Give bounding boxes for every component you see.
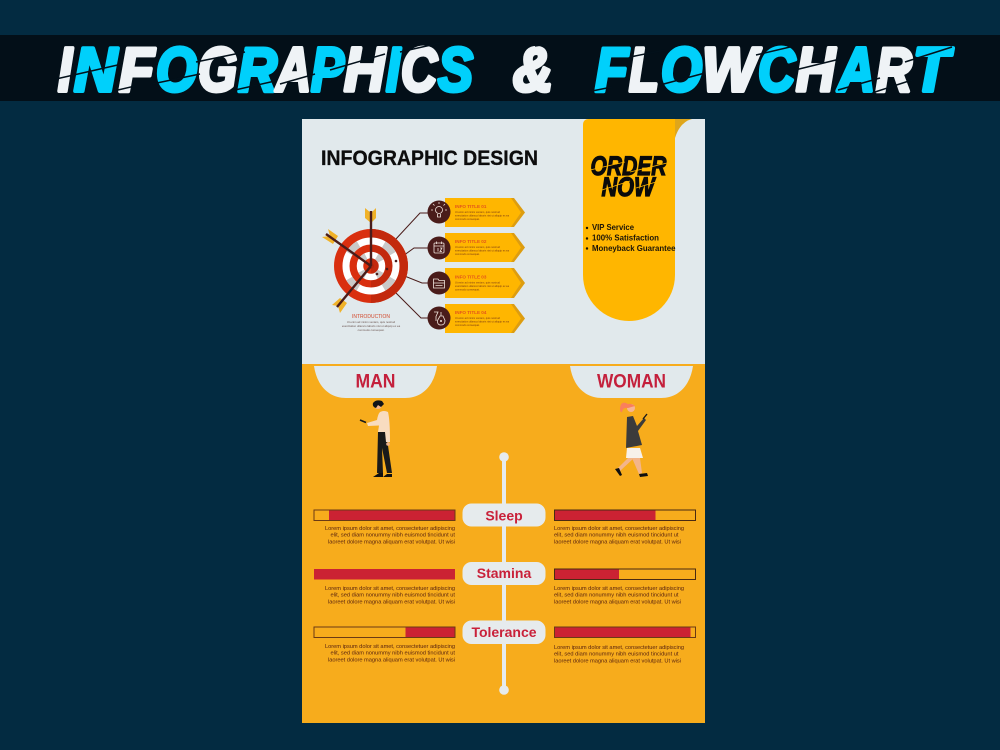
order now bullets: 100% Satisfaction (592, 234, 659, 242)
row: tolerance man (314, 627, 455, 663)
info item 04: commodo consequat. (455, 323, 480, 327)
row: sleep woman: Lorem ipsum dolor sit amet, consectetuer adipiscing (554, 526, 684, 532)
order now bullets: VIP Service (592, 223, 634, 232)
icon: calendar (428, 236, 450, 260)
label: sleep: Sleep (485, 508, 523, 524)
order now heading (590, 151, 667, 202)
info item 03: exercitation ullamco laboris nisi ut aliquip ex ea (455, 284, 510, 288)
row: sleep woman (554, 510, 696, 545)
info item 01: INFO TITLE 01 (455, 204, 487, 209)
icon: folder (428, 272, 450, 294)
info item 04: Ut enim ad minim veniam, quis nostrud (455, 316, 500, 320)
figure: woman with phone (615, 403, 648, 477)
panel: top light area (302, 119, 705, 365)
row: tolerance woman: Lorem ipsum dolor sit amet, consectetuer adipiscing (554, 645, 684, 651)
info item 02 (428, 233, 525, 262)
title: Infographics & Flowchart: I (386, 36, 401, 105)
arrow: bottom left (332, 266, 371, 313)
info item 04: INFO TITLE 04 (455, 310, 487, 315)
info item 04 (428, 304, 525, 333)
title: Infographics & Flowchart: W (702, 36, 761, 105)
title: Infographics & Flowchart: S (438, 36, 473, 105)
icon: light bulb (428, 200, 450, 224)
label: stamina: Stamina (477, 565, 531, 581)
title: Infographics & Flowchart (56, 36, 954, 105)
timeline (462, 452, 546, 695)
title: Infographics & Flowchart: P (311, 36, 345, 105)
row: sleep man: Lorem ipsum dolor sit amet, consectetuer adipiscing (325, 526, 455, 532)
title: Infographics & Flowchart: & (513, 36, 553, 105)
title: Infographics & Flowchart: F (595, 36, 630, 105)
icon: money bag (428, 306, 450, 330)
heading: infographic design: INFOGRAPHIC DESIGN (321, 147, 538, 170)
tab: man: MAN (356, 372, 396, 392)
order now bullets: Moneyback Guarantee (592, 244, 676, 253)
info item 02: exercitation ullamco laboris nisi ut aliquip ex ea (455, 248, 510, 252)
info item 01: exercitation ullamco laboris nisi ut aliquip ex ea (455, 214, 510, 218)
title: Infographics & Flowchart: O (156, 36, 197, 105)
order now heading: ORDER (590, 151, 667, 181)
order now ribbon (583, 119, 692, 321)
title: Infographics & Flowchart: L (629, 36, 659, 105)
row: stamina man: elit, sed diam nonummy nibh euismod tincidunt ut (330, 593, 455, 599)
title: Infographics & Flowchart: I (58, 36, 73, 105)
row: tolerance man: elit, sed diam nonummy nibh euismod tincidunt ut (330, 651, 455, 657)
info item 03: INFO TITLE 03 (455, 274, 487, 280)
row: tolerance woman (554, 627, 696, 664)
title: Infographics & Flowchart: C (401, 36, 438, 105)
row: sleep man: laoreet dolore magna aliquam erat volutpat. Ut wisi (328, 539, 455, 545)
row: stamina man: laoreet dolore magna aliquam erat volutpat. Ut wisi (328, 599, 455, 605)
info item 02: commodo consequat. (455, 252, 480, 256)
row: tolerance woman: elit, sed diam nonummy nibh euismod tincidunt ut (554, 652, 679, 658)
info item 04: exercitation ullamco laboris nisi ut aliquip ex ea (455, 320, 510, 324)
info item 01 (428, 198, 525, 227)
poster (302, 119, 705, 723)
introduction text: Ut enim ad minim veniam, quis nostrud (347, 320, 396, 324)
row: stamina woman: laoreet dolore magna aliquam erat volutpat. Ut wisi (554, 599, 681, 605)
info item 02: INFO TITLE 02 (455, 239, 487, 244)
row: tolerance man: laoreet dolore magna aliquam erat volutpat. Ut wisi (328, 657, 455, 663)
row: sleep man (314, 510, 455, 545)
order now heading: NOW (602, 172, 657, 202)
label: tolerance (462, 620, 546, 644)
figure: man with phone (360, 400, 392, 477)
row: sleep man: elit, sed diam nonummy nibh euismod tincidunt ut (330, 533, 455, 539)
introduction text: INTRODUCTION (352, 314, 390, 320)
panel: bottom orange area (302, 364, 705, 723)
order now bullets (586, 223, 676, 253)
row: stamina man (314, 569, 455, 605)
title: Infographics & Flowchart: C (758, 36, 796, 105)
target chart (322, 208, 408, 313)
introduction text: exercitation ullamco laboris nisi ut aliquip ex ea (342, 324, 401, 328)
title: Infographics & Flowchart: O (661, 36, 702, 105)
row: stamina woman: elit, sed diam nonummy nibh euismod tincidunt ut (554, 593, 679, 599)
label: sleep (462, 504, 546, 526)
connector lines (377, 213, 430, 318)
arrow: top (365, 208, 376, 266)
label: stamina (462, 562, 546, 585)
tab: man (314, 366, 437, 398)
title: Infographics & Flowchart: T (913, 36, 954, 105)
info item 03: commodo consequat. (455, 288, 480, 292)
title: Infographics & Flowchart: R (876, 36, 912, 105)
info item 03 (428, 268, 525, 298)
row: tolerance man: Lorem ipsum dolor sit amet, consectetuer adipiscing (325, 644, 455, 650)
info item 01: commodo consequat. (455, 217, 480, 221)
row: stamina woman: Lorem ipsum dolor sit amet, consectetuer adipiscing (554, 586, 684, 592)
introduction text (342, 314, 401, 332)
title: Infographics & Flowchart: A (274, 36, 311, 105)
info item 02: Ut enim ad minim veniam, quis nostrud (455, 245, 500, 249)
row: stamina woman (554, 569, 696, 605)
title: Infographics & Flowchart: H (344, 36, 386, 105)
title: Infographics & Flowchart: N (74, 36, 118, 105)
title: Infographics & Flowchart: F (119, 36, 156, 105)
row: stamina man: Lorem ipsum dolor sit amet, consectetuer adipiscing (325, 586, 455, 592)
arrow: left (322, 229, 371, 266)
title: Infographics & Flowchart: A (836, 36, 875, 105)
info item 03: Ut enim ad minim veniam, quis nostrud (455, 280, 500, 284)
info item 01: Ut enim ad minim veniam, quis nostrud (455, 210, 500, 214)
title: Infographics & Flowchart: G (198, 36, 237, 105)
label: tolerance: Tolerance (471, 624, 537, 640)
title: Infographics & Flowchart: R (238, 36, 277, 105)
tab: woman (570, 366, 693, 398)
row: tolerance woman: laoreet dolore magna aliquam erat volutpat. Ut wisi (554, 658, 681, 664)
tab: woman: WOMAN (597, 372, 666, 392)
row: sleep woman: elit, sed diam nonummy nibh euismod tincidunt ut (554, 533, 679, 539)
title banner (0, 35, 1000, 105)
introduction text: commodo consequat. (358, 328, 385, 332)
title: Infographics & Flowchart: H (796, 36, 836, 105)
row: sleep woman: laoreet dolore magna aliquam erat volutpat. Ut wisi (554, 539, 681, 545)
